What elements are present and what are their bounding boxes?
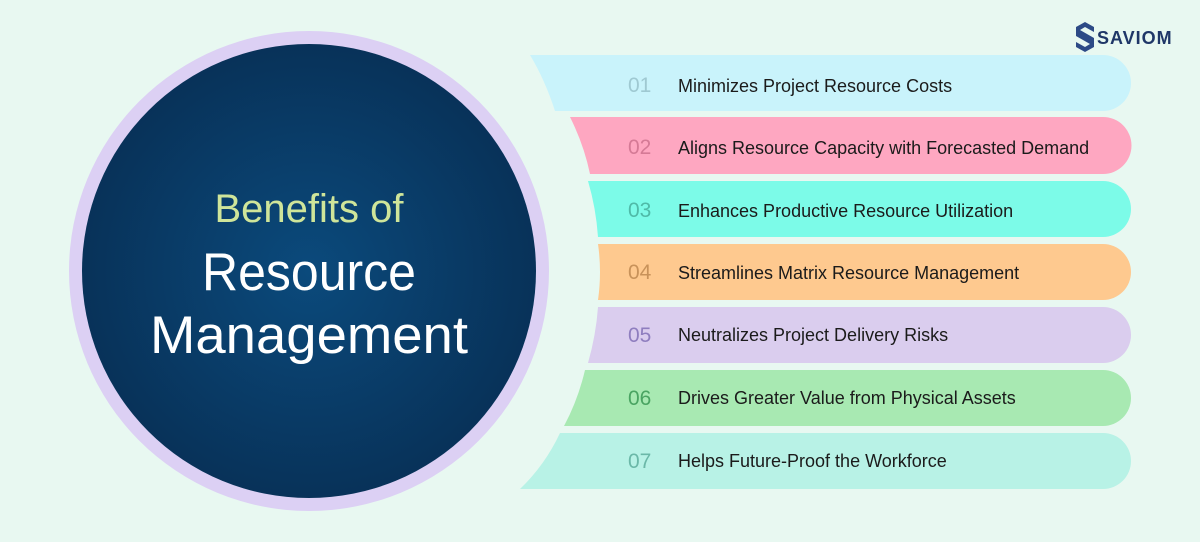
title text: Benefits of	[214, 187, 404, 231]
bar 02	[570, 117, 1132, 174]
bar 04: Streamlines Matrix Resource Management	[678, 263, 1019, 283]
bar 07: 07	[628, 450, 651, 473]
title text	[150, 187, 468, 365]
bar 07: Helps Future-Proof the Workforce	[678, 451, 947, 471]
title text: Management	[150, 306, 468, 365]
bar 05	[588, 307, 1131, 363]
bar 04: 04	[628, 261, 652, 284]
bar 02: Aligns Resource Capacity with Forecasted Demand	[678, 138, 1089, 158]
bar 03: 03	[628, 199, 651, 222]
bar 03: Enhances Productive Resource Utilization	[678, 201, 1013, 221]
bar 06	[564, 370, 1131, 426]
bar 07	[520, 433, 1131, 489]
bar 05: 05	[628, 324, 651, 347]
bar 01: Minimizes Project Resource Costs	[678, 76, 952, 96]
bar 02: 02	[628, 136, 651, 159]
title text: Resource	[202, 243, 416, 302]
circle: title	[69, 31, 549, 511]
bars	[520, 55, 1132, 489]
logo: saviom: SAVIOM	[1097, 28, 1173, 48]
bar 01	[530, 55, 1131, 111]
bar 01: 01	[628, 74, 651, 97]
bar 05: Neutralizes Project Delivery Risks	[678, 325, 948, 345]
bar 06: Drives Greater Value from Physical Assets	[678, 388, 1016, 408]
bar 04	[598, 244, 1131, 300]
bar 06: 06	[628, 387, 651, 410]
logo: saviom	[1076, 22, 1173, 52]
bar 03	[588, 181, 1131, 237]
